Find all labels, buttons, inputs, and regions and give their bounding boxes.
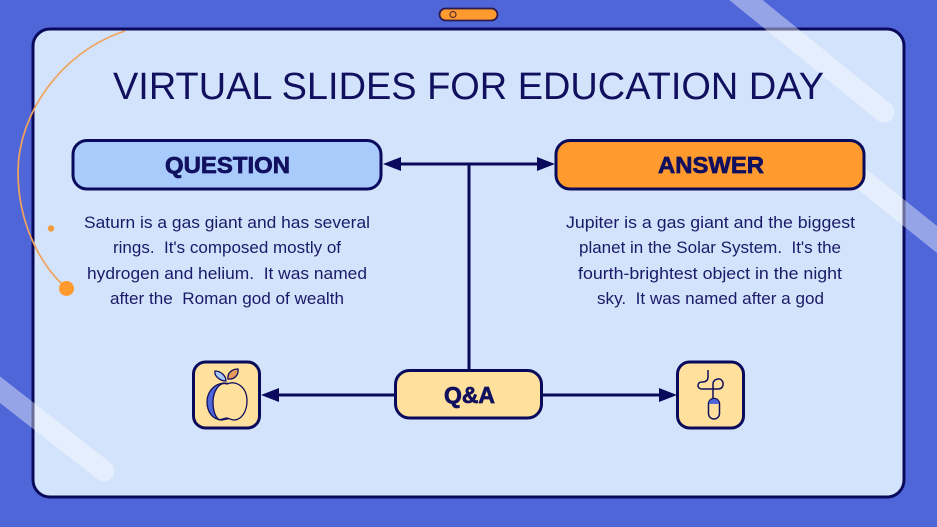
question heading box: QUESTION — [165, 152, 290, 178]
icon: computer mouse — [678, 362, 744, 428]
answer body text: sky. It was named after a god — [597, 290, 824, 308]
top device pill — [440, 8, 498, 20]
Q&A box: Q&A — [444, 382, 495, 408]
answer body text: planet in the Solar System. It's the — [579, 239, 841, 257]
question body text — [84, 214, 370, 308]
orange orbit decoration — [18, 31, 125, 296]
icon: apple — [194, 362, 260, 428]
answer body text — [566, 214, 855, 308]
answer heading box: ANSWER — [658, 152, 764, 178]
question body text: Saturn is a gas giant and has several — [84, 214, 370, 232]
title: VIRTUAL SLIDES FOR EDUCATION DAY — [113, 66, 824, 108]
answer heading box — [556, 140, 864, 189]
answer body text: Jupiter is a gas giant and the biggest — [566, 214, 855, 232]
question body text: hydrogen and helium. It was named — [87, 265, 367, 283]
question body text: rings. It's composed mostly of — [113, 239, 341, 257]
question body text: after the Roman god of wealth — [110, 290, 344, 308]
Q&A box — [396, 370, 542, 418]
question heading box — [73, 140, 381, 189]
answer body text: fourth-brightest object in the night — [578, 265, 842, 283]
connector arrows — [261, 157, 677, 402]
